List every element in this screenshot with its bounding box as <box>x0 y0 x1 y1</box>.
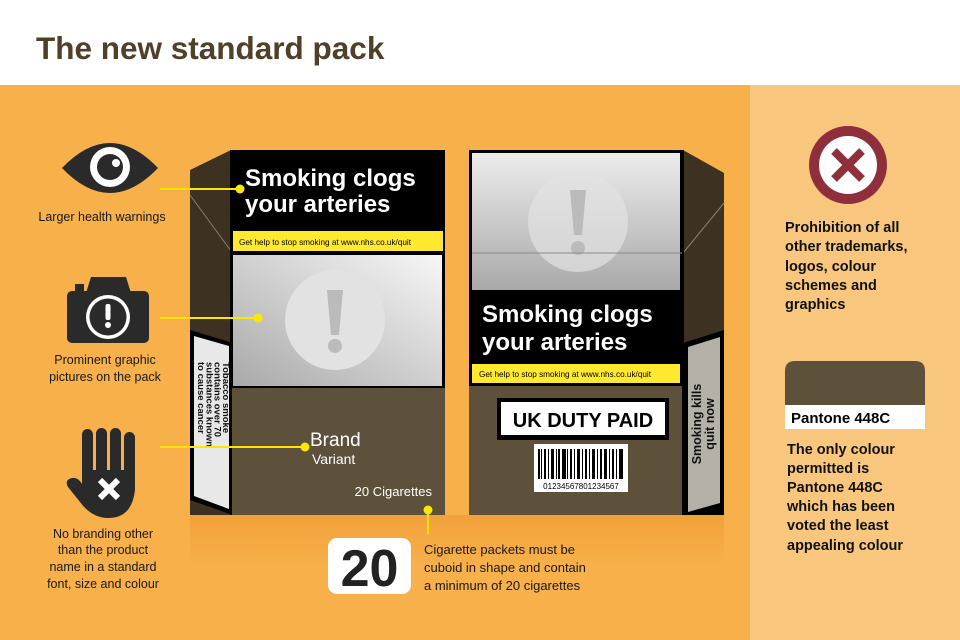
left pack side warning label: substances known <box>203 362 214 447</box>
text: only colour permitted: which has been <box>786 499 895 515</box>
duty paid label <box>497 398 669 440</box>
left pack front <box>231 150 445 515</box>
left pack warning header <box>231 150 445 230</box>
label: no branding: font, size and colour <box>47 577 159 591</box>
right pack warning header: Smoking clogs <box>482 301 653 328</box>
label: prominent graphic pictures: pictures on the pack <box>49 370 162 384</box>
pantone swatch: Pantone 448C <box>791 410 890 427</box>
right pack side warning label: Smoking kills <box>690 384 704 464</box>
text: cuboid requirement: a minimum of 20 cigarettes <box>424 578 581 593</box>
left pack side warning label <box>190 330 233 515</box>
text: prohibition: graphics <box>785 297 845 313</box>
text: prohibition: logos, colour <box>785 259 876 275</box>
left pack side warning label: to cause cancer <box>195 362 206 434</box>
left pack: your arteries <box>245 191 390 218</box>
text: only colour permitted: Pantone 448C <box>787 480 883 496</box>
left pack yellow helpline <box>231 229 445 253</box>
right pack: Get help to stop smoking at www.nhs.co.uk/quit <box>479 370 652 379</box>
text: only colour permitted: The only colour <box>787 442 895 458</box>
label: larger health warnings: Larger health warnings <box>38 210 166 224</box>
text: cuboid requirement: Cigarette packets must be <box>424 542 575 557</box>
label: no branding: No branding other <box>53 527 153 541</box>
text: only colour permitted: appealing colour <box>787 538 903 554</box>
label: no branding: than the product <box>58 543 149 557</box>
title: The new standard pack <box>36 30 385 66</box>
side panel background <box>750 85 960 640</box>
left pack <box>190 150 445 515</box>
connectors <box>160 184 432 534</box>
barcode <box>534 444 628 492</box>
left pack brand text: Brand <box>310 430 361 451</box>
text: prohibition: schemes and <box>785 278 877 294</box>
left pack: Get help to stop smoking at www.nhs.co.uk/quit <box>239 238 412 247</box>
20 badge: 20 <box>341 540 398 598</box>
right pack side warning label <box>683 330 724 515</box>
right pack yellow helpline <box>469 361 683 386</box>
icon: hand with cross <box>67 428 135 518</box>
text: only colour permitted: permitted is <box>787 461 869 477</box>
pantone swatch <box>785 361 925 429</box>
main panel background <box>0 85 750 640</box>
text: prohibition: Prohibition of all <box>785 220 899 236</box>
icon: prohibition <box>809 126 887 204</box>
right pack side warning label: quit now <box>703 398 717 450</box>
text: prohibition: other trademarks, <box>785 239 908 255</box>
left pack: Variant <box>312 451 355 467</box>
left pack side face <box>190 150 231 515</box>
left pack side warning label: contains over 70 <box>212 362 223 437</box>
pack shadow <box>190 515 724 565</box>
text: only colour permitted: voted the least <box>787 518 889 534</box>
right pack side face <box>683 150 724 515</box>
icon: camera <box>67 277 149 343</box>
text: cuboid requirement: cuboid in shape and contain <box>424 560 586 575</box>
left pack: Smoking clogs <box>245 165 416 192</box>
left pack side warning label: Tobacco smoke <box>220 362 231 433</box>
20 badge <box>328 538 411 598</box>
label: prominent graphic pictures: Prominent graphic <box>54 353 156 367</box>
right pack: your arteries <box>482 329 627 356</box>
barcode: 01234567801234567 <box>543 482 619 491</box>
icon: eye <box>62 143 158 193</box>
right pack graphic picture <box>469 150 683 362</box>
label: no branding: name in a standard <box>49 560 157 574</box>
right pack <box>469 150 724 515</box>
right pack: UK DUTY PAID <box>513 410 653 432</box>
left pack graphic picture <box>231 252 445 388</box>
left pack: 20 Cigarettes <box>355 484 432 499</box>
header background <box>0 0 960 85</box>
right pack front <box>469 150 683 515</box>
